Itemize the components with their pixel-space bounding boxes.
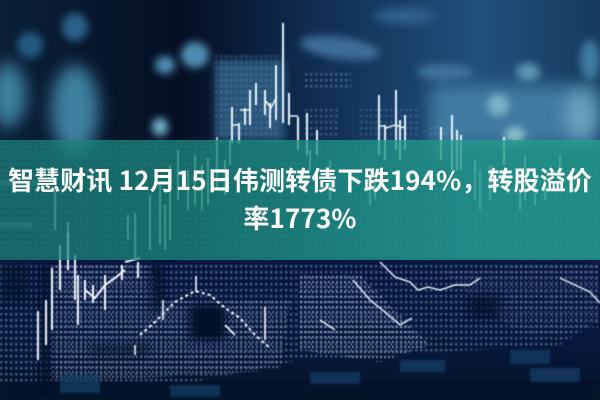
stock chart spikes, upper: [232, 23, 504, 170]
trend lines, lower right: [320, 262, 600, 330]
title: 智慧财讯 12月15日伟测转债下跌194%，转股溢价: [8, 161, 592, 198]
dark lower data panel: [0, 258, 600, 400]
title: [8, 161, 592, 236]
stock chart, lower left: [38, 232, 140, 360]
stock chart spikes, band: [55, 137, 560, 260]
title band: [0, 140, 600, 260]
blurred foreground keys: [60, 350, 580, 397]
dark gaps in lower grid: [0, 262, 600, 400]
blurred sky background: [0, 0, 600, 270]
title: 率1773%: [243, 199, 357, 236]
dotted trend arc: [135, 276, 270, 355]
dot matrix data grids, in band and lower: [0, 140, 600, 385]
dot matrix data grids, upper: [215, 55, 460, 140]
